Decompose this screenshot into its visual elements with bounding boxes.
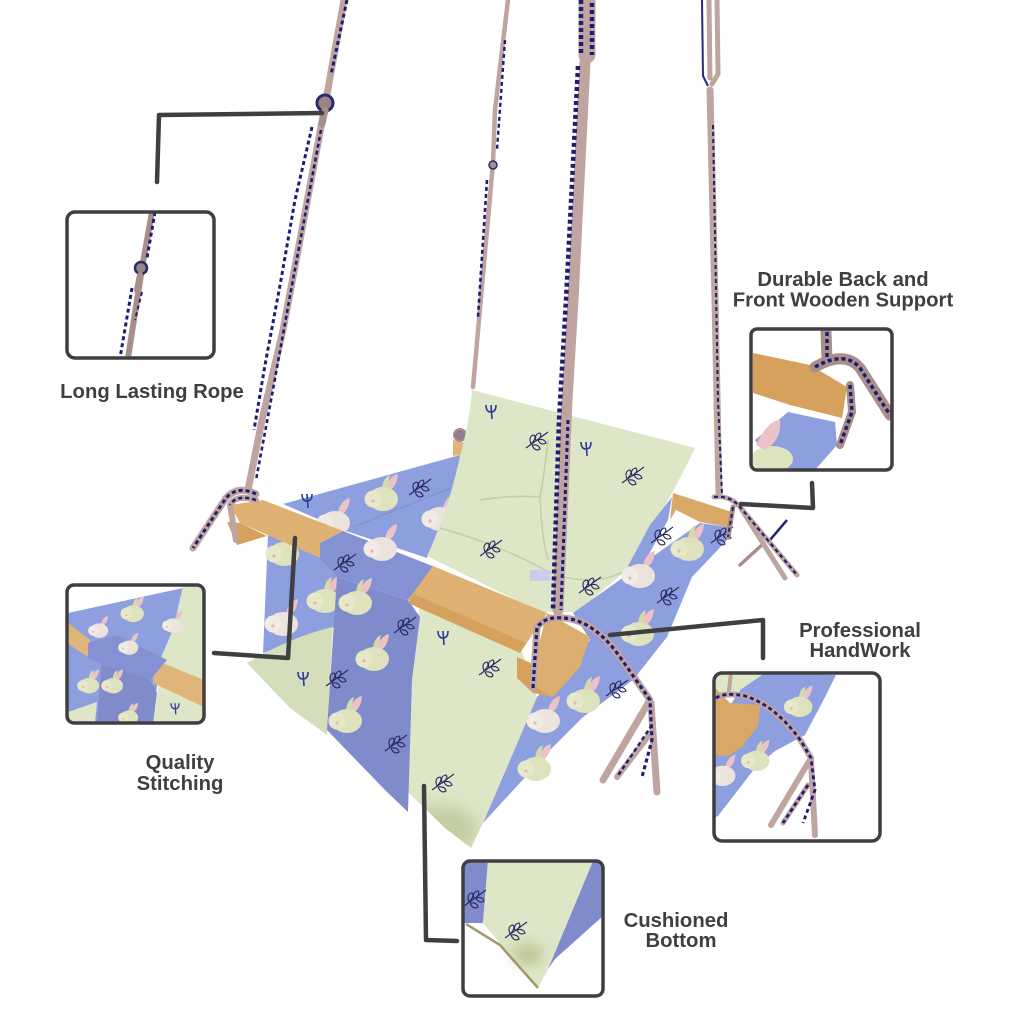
label: cushioned bottom: Bottom (646, 930, 716, 952)
front blue fabric strap (320, 524, 435, 812)
back left knot (454, 429, 466, 441)
inset: rope detail (120, 212, 155, 358)
rope knots and tassels (193, 490, 797, 792)
label: professional handwork: Professional (799, 620, 921, 642)
inset: stitching detail (67, 586, 204, 725)
inset: wooden support detail (751, 332, 890, 472)
label: long lasting rope: Long Lasting Rope (60, 381, 244, 403)
left rope (248, 0, 347, 490)
label: quality stitching: Quality (146, 752, 215, 774)
back rope (473, 0, 508, 387)
right side fabric panel (483, 523, 733, 823)
back wooden bar pieces (453, 440, 732, 527)
lower left fabric panel (263, 529, 342, 653)
label: cushioned bottom: Cushioned (624, 910, 728, 932)
wooden front bar (227, 500, 590, 697)
inset frames (67, 212, 892, 996)
label: quality stitching: Stitching (137, 773, 223, 795)
label: wooden support: Front Wooden Support (733, 290, 953, 312)
left side fabric panel (283, 455, 460, 558)
right back fabric piece (628, 497, 673, 570)
inset: handwork detail (707, 673, 836, 835)
back cushion (427, 390, 695, 612)
connector lines (157, 113, 813, 941)
right rope (702, 0, 722, 494)
center rope (553, 0, 592, 610)
inset: cushion detail (463, 861, 603, 988)
label: wooden support: Durable Back and (757, 269, 929, 291)
label: professional handwork: HandWork (809, 640, 911, 662)
seat bottom cushion (247, 600, 537, 854)
